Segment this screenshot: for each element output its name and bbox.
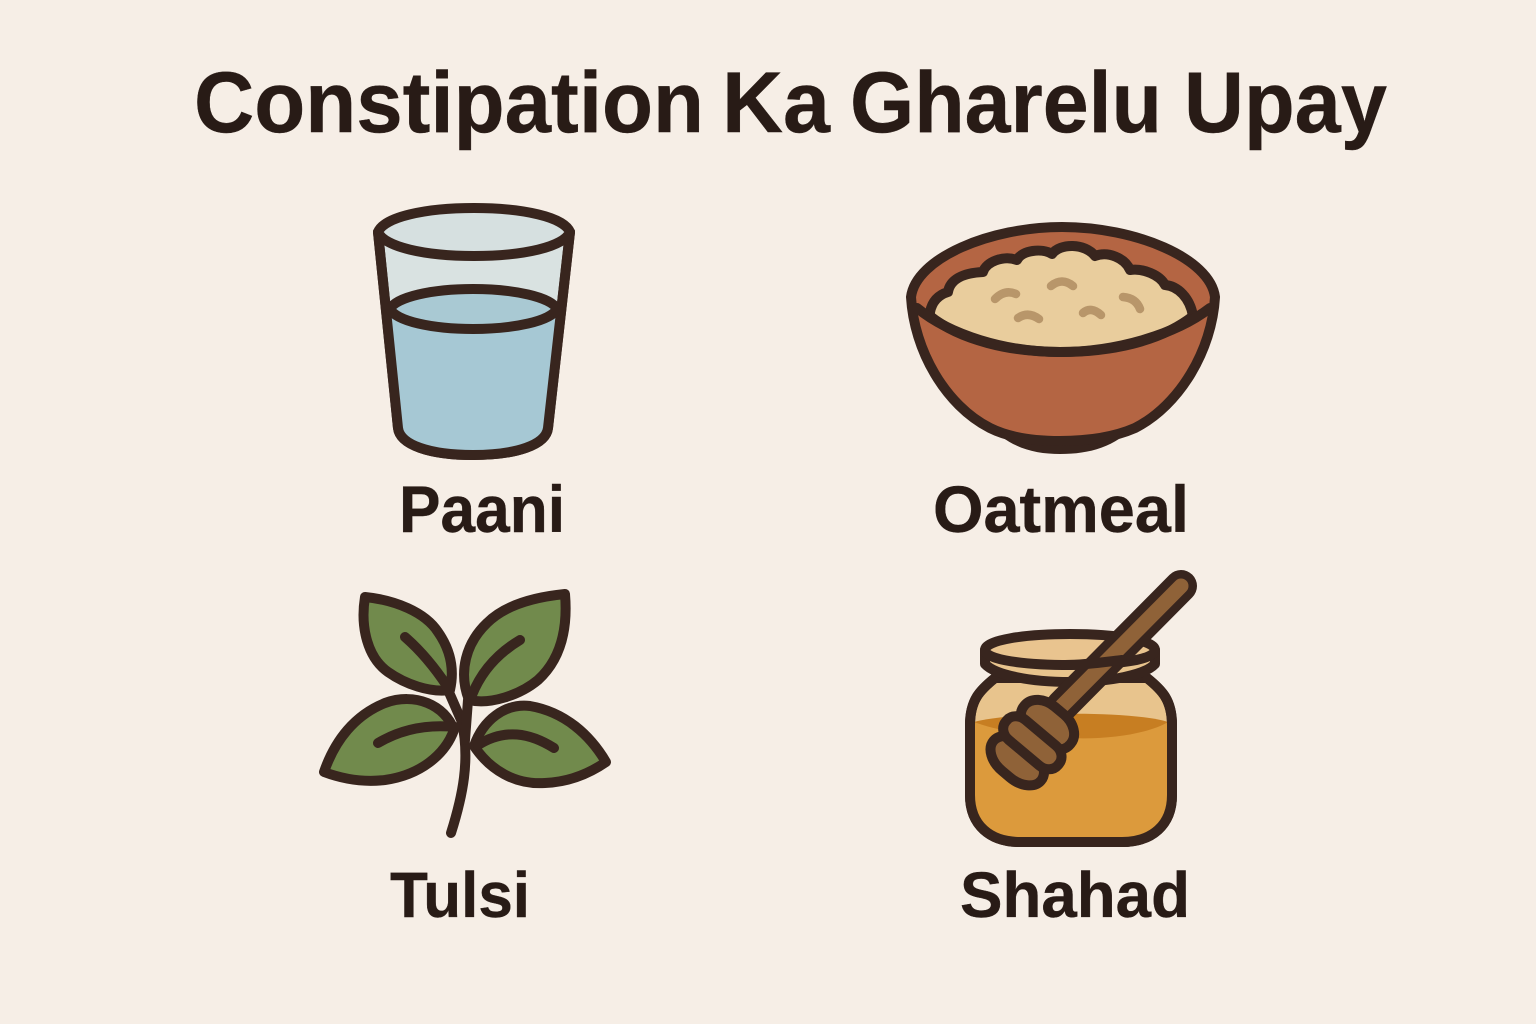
label: Shahad: Shahad xyxy=(960,859,1190,931)
title: Gharelu xyxy=(850,55,1162,151)
icon: oatmeal bowl xyxy=(911,227,1215,454)
icon: honey jar with dipper xyxy=(970,586,1181,842)
label: Paani: Paani xyxy=(399,472,565,546)
icon: glass of water xyxy=(378,208,570,455)
dipper handle xyxy=(1062,586,1181,706)
dipper head xyxy=(980,689,1085,796)
label: Tulsi: Tulsi xyxy=(390,859,530,931)
title: Constipation xyxy=(194,55,704,151)
icon: tulsi leaves xyxy=(324,594,606,833)
label: Oatmeal: Oatmeal xyxy=(933,472,1189,546)
title xyxy=(194,55,1387,151)
title: Ka xyxy=(722,55,831,151)
title: Upay xyxy=(1184,55,1387,151)
